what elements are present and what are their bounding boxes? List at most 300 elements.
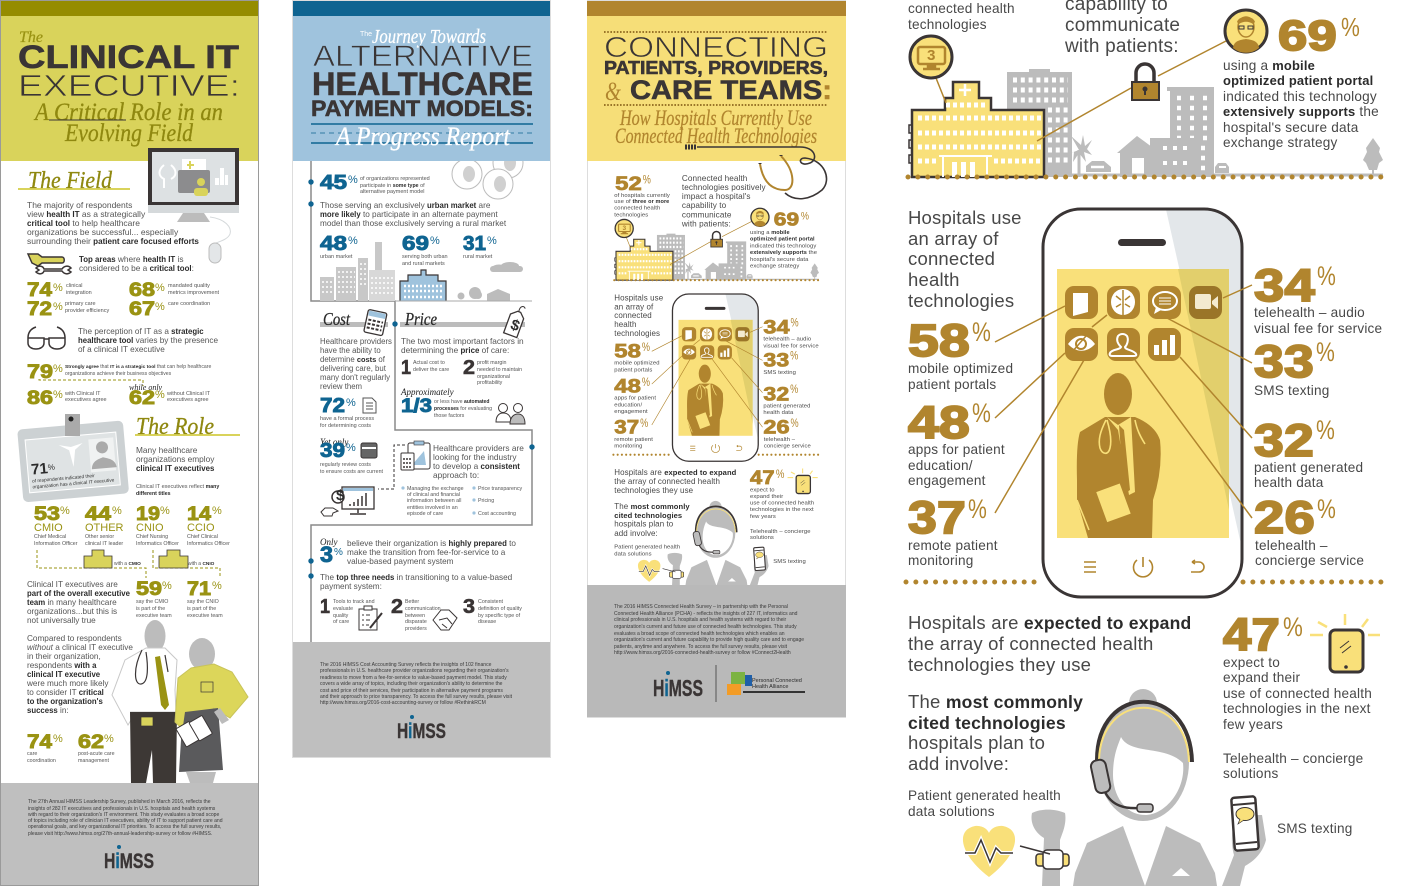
- stats: markets: 69: [402, 233, 429, 255]
- text: consistent approach: approach to:: [433, 470, 479, 480]
- stats: technology use: 34: [763, 317, 790, 339]
- stat: 34%: %: [1317, 261, 1336, 291]
- title: [18, 29, 240, 147]
- top three needs list: 3: [463, 596, 475, 618]
- list: approach items: episode of care: [407, 511, 443, 517]
- stats: strategic tool agreement: executives agree: [167, 397, 209, 403]
- stats: markets: [320, 233, 497, 267]
- stats: technology use: 58: [614, 340, 641, 362]
- stats: critical tool areas: metrics improvement: [168, 290, 220, 296]
- text: survey note: The 27th Annual HIMSS Leadership Survey, published in March 2016, reflects the: [28, 799, 211, 805]
- text: the field intro: critical tool to help healthcare: [27, 218, 140, 228]
- text: expected to expand: technologies they use: [908, 654, 1091, 675]
- stats: critical tool areas: mandated quality: [168, 283, 210, 289]
- text: the field intro: view health IT as a strategically: [27, 209, 145, 219]
- icon: hammer and wrench: [28, 254, 71, 274]
- stat: 45%: alternative payment model: [360, 189, 425, 195]
- stats: technology use: concierge service: [764, 443, 811, 449]
- text: connected health technologies: technologies: [908, 17, 987, 32]
- text: the field intro: The majority of respondents: [27, 200, 132, 210]
- icon: price tag: [504, 303, 528, 338]
- title: ALTERNATIVE: [313, 40, 533, 73]
- text: array of technologies: technologies: [908, 290, 1014, 311]
- stats: markets: 31: [463, 233, 486, 255]
- stat: 45%: 45: [320, 172, 347, 194]
- text: capability: with patients:: [1064, 36, 1179, 57]
- text: compared to respondents: Compared to respondents: [27, 634, 122, 643]
- stats: technology use: 33: [763, 349, 789, 371]
- stats: markets: rural market: [463, 254, 493, 260]
- stats: critical to success: %: [53, 733, 63, 745]
- text: top three needs: payment system:: [320, 582, 382, 591]
- stats: critical tool areas: clinical: [66, 283, 83, 289]
- footer: survey description: [587, 585, 846, 717]
- title: Evolving Field: [64, 120, 193, 147]
- icon: desktop computer: [148, 148, 239, 263]
- stat: 69%: %: [801, 210, 809, 222]
- stat: 72%: for determining costs: [320, 423, 371, 429]
- text: mobile portal: optimized patient portal: [750, 237, 815, 243]
- icon: calculator: [364, 309, 387, 336]
- list: approach items: Pricing: [478, 498, 494, 504]
- list: approach items: entities involved in an: [407, 505, 458, 511]
- stats: technology use: 32: [763, 383, 789, 405]
- stat: 34%: visual fee for service: [1254, 321, 1382, 336]
- logo: HIMSS: HiMSS: [104, 850, 154, 873]
- stats: strategic tool agreement: 86: [27, 388, 53, 409]
- text: capability: impact a hospital's: [682, 192, 751, 201]
- text: capability: technologies positively: [682, 183, 767, 192]
- stats: technology use: %: [791, 317, 799, 330]
- price factors: needed to maintain: [477, 367, 522, 373]
- top three needs list: between: [405, 613, 425, 619]
- numeral in monitor: 3: [622, 225, 626, 232]
- stats: technology use: %: [640, 417, 648, 430]
- text: most commonly cited: cited technologies: [614, 511, 682, 520]
- text: array of technologies: connected: [614, 311, 652, 320]
- stats: critical to success: care: [27, 751, 37, 757]
- text: connected health technologies: connected health: [908, 1, 1015, 16]
- illustration: two executives: [112, 620, 248, 783]
- stats: technology use: %: [791, 417, 799, 430]
- text: compared to respondents: to consider IT critical: [27, 688, 104, 697]
- icon: coins: [452, 161, 524, 200]
- stats: technology use: [614, 317, 819, 449]
- text: compared to respondents: success in:: [27, 706, 69, 715]
- text: survey note: evaluates a broad scope of connected health technologies which enables an: [614, 631, 785, 637]
- title: PATIENTS, PROVIDERS,: [604, 57, 828, 78]
- top three needs list: Tools to track and: [333, 599, 375, 605]
- footer: survey description: [1, 783, 258, 885]
- skyline illustration: [614, 208, 819, 280]
- stat: 48%: 48: [908, 397, 970, 448]
- stats: executive team: %: [212, 580, 222, 592]
- text: most commonly cited: The most commonly: [614, 502, 690, 511]
- stat: 39%: to ensure costs are current: [320, 469, 384, 475]
- header background: [293, 16, 550, 161]
- stats: strategic tool agreement: without Clinical IT: [166, 391, 211, 397]
- title: CARE TEAMS :: [630, 75, 832, 105]
- stat: 34%: telehealth – audio: [1254, 305, 1365, 320]
- stats: strategic tool agreement: executives agree: [65, 397, 107, 403]
- stat: 48%: education/: [908, 458, 973, 473]
- stats: technology use: remote patient: [614, 437, 653, 443]
- stats: executive titles: 44: [85, 504, 112, 525]
- text: array of technologies: connected: [908, 248, 995, 269]
- stat: 33%: SMS texting: [1254, 383, 1330, 398]
- stats: technology use: patient portals: [614, 368, 652, 374]
- stat: 26%: [1254, 492, 1364, 568]
- stat: 72%: [320, 395, 374, 429]
- stat: 3%: Only: [320, 537, 338, 547]
- heading: The Role: The Role: [136, 414, 214, 440]
- text: capability: Connected health: [682, 174, 748, 183]
- stat: 69%: %: [1341, 12, 1360, 42]
- lower illustration: [638, 469, 818, 586]
- title: A Progress Report: [334, 122, 511, 151]
- icon: ID badge: organization has a clinical IT executive: [32, 477, 115, 491]
- text: survey note: clinical professionals in U.S. hospitals and health systems with regard to their: [614, 617, 787, 623]
- text: compared to respondents: respondents with a: [27, 661, 96, 670]
- top three needs list: communication: [405, 606, 441, 612]
- text: mobile portal: optimized patient portal: [1223, 73, 1373, 88]
- stats: strategic tool agreement: Strongly agree that IT is a strategic tool that can help healthcare: [65, 364, 211, 370]
- title: [311, 26, 533, 151]
- top three needs list: Consistent: [478, 599, 504, 605]
- stat: 34%: [1254, 260, 1382, 336]
- stats: markets: %: [487, 235, 497, 247]
- stat: 45%: participate in some type of: [360, 183, 425, 189]
- stats: technology use: 48: [614, 376, 641, 398]
- text: compared to respondents: without a clinical IT executive: [27, 643, 133, 652]
- stats: critical tool areas: [27, 280, 220, 320]
- stats: strategic tool agreement: with Clinical IT: [64, 391, 101, 397]
- text: the role intro: Many healthcare: [136, 445, 198, 455]
- stats: technology use: 37: [614, 417, 639, 439]
- stats: strategic tool agreement: 79: [27, 362, 53, 383]
- illustration: city skyline: [320, 242, 532, 301]
- stat: 26%: concierge service: [1255, 553, 1364, 568]
- stat: 33%: [1254, 336, 1335, 398]
- stat: 47%: %: [1283, 612, 1303, 642]
- top three needs list: 2: [391, 596, 403, 618]
- text: survey note: organization's current and future use of connected health technologies. This study: [614, 624, 797, 630]
- stat: 47%: %: [776, 468, 785, 481]
- title: The: [19, 29, 43, 46]
- text: array of technologies: health: [908, 269, 960, 290]
- stat: 69%: [774, 208, 809, 229]
- price factors: organizational: [477, 374, 510, 380]
- text: with a CMIO / CNIO: with a CMIO: [114, 561, 141, 567]
- text: expect to expand: expand their: [750, 494, 783, 500]
- price factors: [401, 357, 522, 386]
- stats: critical tool areas: %: [53, 282, 63, 294]
- stats: markets: and rural markets: [402, 261, 445, 267]
- stat: 34%: 34: [1254, 260, 1315, 311]
- stats: technology use: monitoring: [614, 443, 643, 449]
- text: patient generated: Patient generated health: [614, 545, 680, 551]
- stats: critical tool areas: 72: [27, 299, 52, 320]
- stats: technology use: telehealth – audio: [763, 337, 812, 343]
- text: cost intro: determine costs of: [320, 355, 385, 364]
- logo: Personal Connected Health Alliance: Health Alliance: [752, 684, 788, 690]
- title: Journey Towards: [372, 26, 486, 48]
- stats: technology use: %: [642, 341, 650, 354]
- header background: [587, 16, 846, 161]
- stats: executive team: executive team: [136, 613, 172, 619]
- text: array of technologies: Hospitals use: [908, 207, 1022, 228]
- stat: 37%: [908, 492, 998, 568]
- price factors: profitability: [477, 380, 503, 386]
- stat: 39%: Yet only: [320, 437, 348, 447]
- text: expected to expand: Hospitals are expected to expand: [908, 612, 1191, 633]
- top three needs list: quality: [333, 613, 349, 619]
- stats: executive titles: %: [160, 505, 170, 517]
- top three needs list: by specific type of: [478, 613, 521, 619]
- text: three or more: use of three or more: [614, 199, 669, 205]
- stat: 69%: 69: [774, 208, 799, 229]
- text: survey note: readiness to move from a fee-for-service to value-based payment model. This study: [320, 675, 507, 681]
- stat: 45%: [320, 172, 430, 195]
- text: consistent approach: to develop a consistent: [433, 461, 520, 471]
- text: most commonly cited: add involve:: [908, 753, 1009, 774]
- text: array of technologies: an array of: [614, 303, 654, 312]
- title: EXECUTIVE:: [18, 68, 240, 103]
- text: survey note: patients, anytime and anywhere. To access the full survey results, please visit: [614, 644, 788, 650]
- stat: 39%: 39: [320, 440, 345, 462]
- stats: strategic tool agreement: %: [155, 389, 165, 401]
- panel: Clinical IT Executive: [0, 0, 258, 886]
- stat: 26%: 26: [1254, 492, 1315, 543]
- header band: [587, 1, 846, 16]
- text: survey note: cost and price of their services, their participation in alternative payment programs: [320, 688, 503, 694]
- text: perception of IT: healthcare tool varies by the presence: [78, 336, 218, 345]
- stats: executive team: 71: [187, 579, 211, 600]
- stats: markets: %: [430, 235, 440, 247]
- stat: 33%: 33: [1254, 336, 1314, 387]
- text: cost intro: Healthcare providers: [320, 337, 392, 346]
- text: most commonly cited: hospitals plan to: [908, 732, 1045, 753]
- stat: 37%: %: [968, 494, 987, 524]
- list: approach items: of clinical and financial: [407, 492, 460, 498]
- text: perception of IT: The perception of IT as a strategic: [78, 327, 204, 336]
- stats: technology use: patient generated: [763, 403, 810, 409]
- text: patient generated: data solutions: [908, 804, 995, 819]
- stats: critical tool areas: provider efficiency: [65, 308, 109, 314]
- stats: executive team: say the CNIO: [187, 599, 219, 605]
- text: compared to respondents: in their organization,: [27, 652, 101, 661]
- stats: strategic tool agreement: %: [53, 363, 63, 375]
- text: expect to expand: technologies in the next: [750, 507, 814, 513]
- stat: 48%: engagement: [908, 473, 986, 488]
- phone illustration: [613, 292, 819, 461]
- text: survey note: insights of 282 IT executives and professionals in U.S. hospitals and health systems: [28, 806, 216, 812]
- numeral in monitor: 3: [927, 47, 936, 64]
- stats: technology use: mobile optimized: [614, 361, 660, 367]
- text: compared to respondents: to the organization's: [27, 697, 103, 706]
- stats: technology use: apps for patient: [614, 396, 656, 402]
- icon: ID badge: [17, 414, 129, 502]
- stats: critical to success: management: [78, 758, 109, 764]
- icon: people: [496, 404, 525, 424]
- stats: executive titles: CCIO: [187, 522, 215, 534]
- stats: strategic tool agreement: %: [53, 389, 63, 401]
- stat: 58%: patient portals: [908, 377, 996, 392]
- text: survey note: with regard to their organization's IT environment. This study evaluates a broad scope: [28, 812, 219, 818]
- stats: critical tool areas: care coordination: [168, 301, 210, 307]
- stat: 47%: [750, 467, 785, 489]
- text: expect to expand: few years: [1223, 717, 1283, 732]
- stats: strategic tool agreement: 62: [129, 388, 155, 409]
- text: top areas: considered to be a critical tool:: [79, 263, 194, 273]
- icon: ID badge: %: [47, 463, 55, 472]
- logo: HIMSS: HiMSS: [653, 675, 703, 701]
- top three needs list: providers: [405, 626, 427, 632]
- connector: dashed titles: [37, 550, 220, 578]
- text: mobile portal: using a mobile: [750, 230, 790, 236]
- stats: executive titles: 53: [34, 504, 60, 525]
- stat: 37%: 37: [908, 492, 966, 543]
- stat: 26%: telehealth –: [1255, 538, 1328, 553]
- text: mobile portal: using a mobile: [1223, 58, 1315, 73]
- stat: 48%: apps for patient: [908, 442, 1005, 457]
- header background: [1, 16, 258, 161]
- text: cost intro: many don't regularly: [320, 373, 390, 382]
- stats: critical to success: 62: [78, 732, 104, 753]
- text: compared to respondents: were much more likely: [26, 679, 109, 688]
- text: cost intro: have the ability to: [320, 346, 381, 355]
- text: top areas: Top areas where health IT is: [79, 254, 184, 264]
- stat: 48%: %: [972, 398, 991, 428]
- stat: one third: [400, 387, 492, 419]
- stats: technology use: SMS texting: [763, 370, 796, 376]
- stat: one third: processes for evaluating: [434, 406, 492, 412]
- stat: 58%: 58: [908, 315, 970, 366]
- text: patient generated: Patient generated health: [908, 788, 1061, 803]
- stats: executive titles: clinical IT leader: [85, 541, 123, 547]
- stats: executive titles: %: [212, 505, 222, 517]
- icon: monitor with coin: [321, 487, 374, 516]
- text: mobile portal: indicated this technology: [1223, 89, 1377, 104]
- header band: [293, 1, 550, 16]
- stat: 47%: 47: [1223, 609, 1280, 660]
- text: cost intro: delivering care, but: [320, 364, 387, 373]
- title: How Hospitals Currently Use: [619, 105, 812, 130]
- icon: price tag: $: [508, 316, 522, 335]
- text: three or more: technologies: [614, 212, 648, 218]
- stats: critical to success: [27, 732, 115, 764]
- stats: executive titles: [34, 504, 230, 547]
- text: survey note: and their approach to price transparency. To access the full survey results, please visit: [320, 694, 513, 700]
- text: survey note: The 2016 HIMSS Connected Health Survey – in partnership with the Personal: [614, 604, 788, 610]
- stat: one third: or less have automated: [434, 399, 489, 405]
- text: SMS texting: SMS texting: [1277, 821, 1352, 836]
- text: titles intro: different titles: [136, 491, 171, 497]
- heading: The Field: The Field: [28, 168, 113, 194]
- text: expected to expand: the array of connected health: [614, 477, 720, 486]
- text: survey note: The 2016 HIMSS Cost Accounting Survey reflects the insights of 102 finance: [320, 662, 492, 668]
- text: mobile portal: exchange strategy: [750, 263, 799, 269]
- text: survey note: operational goals, and key organizational IT priorities. To access the full survey results,: [28, 824, 221, 830]
- text: three or more: connected health: [614, 206, 660, 212]
- text: executive team: part of the overall executive: [27, 589, 131, 598]
- heading: Price: [400, 309, 525, 329]
- stat: 32%: 32: [1254, 415, 1314, 466]
- stat: 47%: 47: [750, 467, 775, 489]
- title: The: [360, 31, 372, 38]
- text: mobile portal: extensively supports the: [750, 250, 817, 256]
- stat: 52%: 52: [615, 173, 642, 195]
- stats: executive team: 59: [136, 579, 162, 600]
- stat: 39%: [320, 437, 384, 475]
- text: patient generated: data solutions: [614, 552, 652, 558]
- stat: 3%: 3: [320, 542, 333, 567]
- text: with a CMIO / CNIO: with a CNIO: [188, 561, 214, 567]
- text: array of technologies: technologies: [614, 329, 660, 338]
- stat: 52%: %: [643, 174, 651, 187]
- stats: technology use: education/: [614, 402, 642, 408]
- text: expected to expand: technologies they use: [614, 486, 694, 495]
- stats: executive team: [136, 579, 223, 619]
- text: survey note: of topics including role of clinician IT executives, ability of IT to support patient care and: [28, 818, 223, 824]
- stats: executive team: %: [162, 580, 172, 592]
- price factors: Actual cost to: [413, 360, 445, 366]
- text: expect to expand: expect to: [1223, 655, 1280, 670]
- text: expected to expand: the array of connected health: [908, 633, 1153, 654]
- text: highly prepared: value-based payment system: [347, 557, 454, 566]
- heading: Cost: Cost: [323, 309, 351, 329]
- top three needs list: disparate: [405, 619, 427, 625]
- stat: 32%: health data: [1254, 475, 1324, 490]
- stat: one third: Approximately: [400, 387, 454, 397]
- title: HEALTHCARE: [312, 66, 533, 102]
- list: approach items: information between all: [407, 498, 461, 504]
- text: the role intro: organizations employ: [136, 454, 215, 464]
- stats: executive team: is part of the: [187, 606, 216, 612]
- stats: markets: 48: [320, 233, 347, 255]
- text: survey note: organization's current and future capability to provide high quality care and to engage: [614, 637, 804, 643]
- list: approach items: Cost accounting: [478, 511, 516, 517]
- stats: technology use: 26: [763, 417, 790, 439]
- text: capability: communicate: [682, 210, 732, 219]
- text: survey note: please visit http://www.himss.org/27th-annual-leadership-survey or follow #HIMSS.: [28, 831, 212, 837]
- text: executive team: Clinical IT executives are: [27, 580, 118, 589]
- stat: 52%: [615, 173, 651, 195]
- text: survey note: Connected Health Alliance (PCHA) - reflects the insights of 227 IT, informatics and: [614, 611, 798, 617]
- title: &: [605, 77, 622, 106]
- text: expect to expand: technologies in the next: [1223, 701, 1371, 716]
- text: most commonly cited: add involve:: [614, 529, 658, 538]
- stat: 3%: [320, 537, 343, 567]
- icon: clipboard with pen: [359, 606, 382, 630]
- text: mobile portal: hospital's secure data: [1223, 120, 1359, 135]
- stat: 72%: 72: [320, 395, 345, 417]
- stats: executive titles: %: [60, 505, 70, 517]
- stats: executive titles: CMIO: [34, 522, 63, 534]
- stats: critical tool areas: integration: [66, 290, 92, 296]
- text: top three needs: The top three needs in transitioning to a value-based: [320, 573, 512, 582]
- stat: 37%: monitoring: [908, 553, 973, 568]
- text: mobile portal: hospital's secure data: [750, 257, 809, 263]
- skyline illustration: [908, 10, 1383, 177]
- stats: critical tool areas: 67: [129, 299, 155, 320]
- panel: enlarged detail of connected health: [906, 0, 1383, 886]
- stats: markets: urban market: [320, 254, 353, 260]
- text: highly prepared: believe their organization is highly prepared to: [347, 539, 516, 548]
- stat: 58%: [908, 315, 1013, 392]
- timeline connector: [311, 161, 532, 642]
- stat: 69%: 69: [1278, 12, 1337, 60]
